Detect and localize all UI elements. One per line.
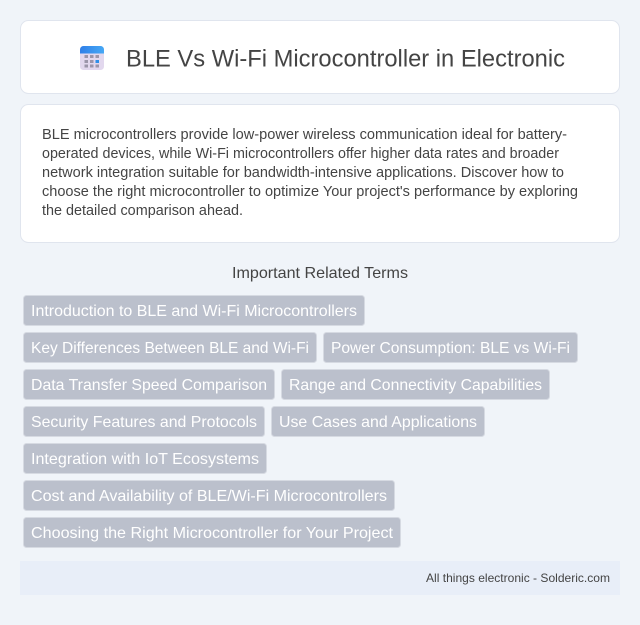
tag: cost: Cost and Availability of BLE/Wi-Fi Microcontrollers bbox=[31, 488, 387, 505]
summary text: BLE microcontrollers provide low-power wireless communication ideal for battery- bbox=[42, 127, 567, 143]
tag: integration bbox=[24, 444, 266, 474]
panel: header bbox=[20, 20, 620, 94]
title: BLE Vs Wi-Fi Microcontroller in Electronic bbox=[126, 46, 565, 72]
tag: use cases: Use Cases and Applications bbox=[279, 414, 477, 431]
tag: use cases bbox=[272, 406, 484, 436]
tag: power consumption bbox=[324, 332, 578, 362]
tag: key differences: Key Differences Between BLE and Wi-Fi bbox=[31, 340, 309, 357]
summary text: network integration suitable for bandwidth-intensive applications. Discover how to bbox=[42, 165, 564, 181]
summary text: the detailed comparison ahead. bbox=[42, 203, 243, 219]
tag list bbox=[24, 296, 578, 548]
tag: security: Security Features and Protocols bbox=[31, 414, 257, 431]
tag: power consumption: Power Consumption: BLE vs Wi-Fi bbox=[331, 340, 570, 357]
summary text bbox=[42, 127, 578, 219]
summary text: operated devices, while Wi-Fi microcontrollers offer higher data rates and broader bbox=[42, 146, 559, 162]
icon: calendar grid bbox=[80, 46, 104, 70]
footer bar bbox=[20, 561, 620, 595]
tag: introduction bbox=[24, 296, 364, 326]
tag: choosing: Choosing the Right Microcontroller for Your Project bbox=[31, 525, 394, 542]
tag: cost bbox=[24, 480, 394, 510]
panel: summary bbox=[20, 104, 620, 242]
footer text: All things electronic - Solderic.com bbox=[426, 571, 610, 585]
tag: range: Range and Connectivity Capabilities bbox=[289, 377, 542, 394]
tag: data transfer bbox=[24, 370, 274, 400]
tag: key differences bbox=[24, 332, 316, 362]
tag: introduction: Introduction to BLE and Wi-Fi Microcontrollers bbox=[31, 303, 357, 320]
tag: security bbox=[24, 406, 264, 436]
tag: choosing bbox=[24, 518, 400, 548]
heading: important related terms: Important Related Terms bbox=[232, 265, 408, 282]
tag: range bbox=[282, 370, 550, 400]
tag: data transfer: Data Transfer Speed Comparison bbox=[31, 377, 267, 394]
summary text: choose the right microcontroller to optimize Your project's performance by exploring bbox=[42, 184, 578, 200]
tag: integration: Integration with IoT Ecosystems bbox=[31, 451, 259, 468]
